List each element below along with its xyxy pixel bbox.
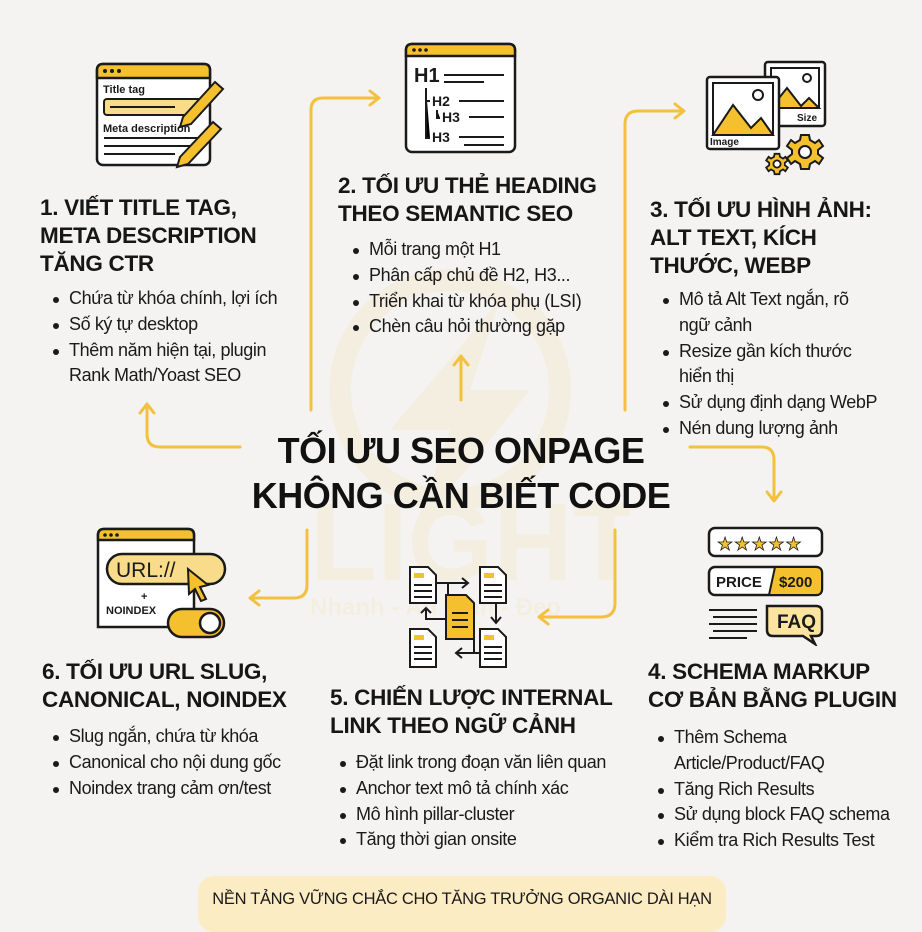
icon: schema: ★★★★★ bbox=[717, 534, 803, 555]
bullets 4: Thêm Schema bbox=[674, 727, 787, 747]
heading 5: LINK THEO NGỮ CẢNH bbox=[330, 713, 576, 738]
icon: internal links bbox=[409, 566, 507, 668]
heading 3: THƯỚC, WEBP bbox=[650, 253, 811, 278]
footer banner: NỀN TẢNG VỮNG CHẮC CHO TĂNG TRƯỞNG ORGANIC DÀI HẠN bbox=[212, 890, 712, 908]
icon: heading structure: H3 bbox=[432, 129, 450, 145]
icon: heading structure: H3 bbox=[442, 109, 460, 125]
heading 1: 1. VIẾT TITLE TAG, bbox=[40, 195, 237, 220]
heading 2 bbox=[338, 173, 597, 226]
icon: URL noindex bbox=[96, 528, 226, 638]
arrow: up to step 2 text bbox=[454, 356, 468, 400]
bullets 2 bbox=[353, 238, 581, 336]
bullets 1 bbox=[53, 288, 277, 385]
bullets 2: Triển khai từ khóa phụ (LSI) bbox=[369, 291, 581, 311]
heading 2: THEO SEMANTIC SEO bbox=[338, 201, 573, 226]
icon: images: Size bbox=[797, 113, 817, 124]
icon: schema: $200 bbox=[779, 574, 812, 591]
center title: TỐI ƯU SEO ONPAGE bbox=[278, 430, 644, 471]
icon: heading structure: H1 bbox=[414, 65, 440, 87]
bullets 5: Mô hình pillar-cluster bbox=[356, 804, 514, 824]
bullets 3 bbox=[663, 288, 877, 438]
heading 3: ALT TEXT, KÍCH bbox=[650, 225, 817, 250]
heading 4: 4. SCHEMA MARKUP bbox=[648, 659, 870, 684]
watermark logo bbox=[310, 269, 630, 620]
center title bbox=[252, 430, 670, 516]
heading 6: CANONICAL, NOINDEX bbox=[42, 687, 287, 712]
bullets 4: Sử dụng block FAQ schema bbox=[674, 804, 890, 824]
icon: schema bbox=[708, 526, 824, 646]
bullets 3: Mô tả Alt Text ngắn, rõ bbox=[679, 289, 849, 309]
bullets 3: hiển thị bbox=[679, 366, 734, 386]
bullets 3: Sử dụng định dạng WebP bbox=[679, 392, 877, 412]
bullets 6: Slug ngắn, chứa từ khóa bbox=[69, 726, 258, 746]
icon: title tag browser: Meta description bbox=[103, 123, 191, 135]
bullets 4: Article/Product/FAQ bbox=[674, 753, 824, 773]
bullets 6: Noindex trang cảm ơn/test bbox=[69, 778, 271, 798]
icon: images bbox=[706, 60, 826, 176]
icon: schema: PRICE bbox=[716, 574, 762, 591]
icon: images: Image bbox=[710, 137, 739, 148]
icon: heading structure: H2 bbox=[432, 93, 450, 109]
heading 4 bbox=[648, 659, 897, 712]
bullets 5: Tăng thời gian onsite bbox=[356, 829, 517, 849]
heading 6 bbox=[42, 659, 287, 712]
bullets 1: Số ký tự desktop bbox=[69, 314, 198, 334]
bullets 5 bbox=[340, 752, 606, 849]
arrow: center to step 1 bbox=[140, 404, 240, 447]
heading 2: 2. TỐI ƯU THẺ HEADING bbox=[338, 173, 597, 198]
bullets 4 bbox=[658, 727, 890, 850]
arrow: to step 4 bbox=[690, 447, 781, 501]
bullets 1: Thêm năm hiện tại, plugin bbox=[69, 340, 266, 360]
bullets 2: Phân cấp chủ đề H2, H3... bbox=[369, 265, 570, 285]
bullets 1: Rank Math/Yoast SEO bbox=[69, 365, 241, 385]
icon: title tag browser bbox=[96, 62, 224, 168]
bullets 6: Canonical cho nội dung gốc bbox=[69, 752, 281, 772]
center title: KHÔNG CẦN BIẾT CODE bbox=[252, 475, 670, 516]
heading 5 bbox=[330, 685, 613, 738]
heading 3: 3. TỐI ƯU HÌNH ẢNH: bbox=[650, 197, 872, 222]
bullets 4: Kiểm tra Rich Results Test bbox=[674, 830, 874, 850]
arrow: to step 5 bbox=[539, 530, 615, 624]
arrow: to step 6 bbox=[250, 530, 307, 605]
bullets 4: Tăng Rich Results bbox=[674, 779, 814, 799]
bullets 3: ngữ cảnh bbox=[679, 315, 752, 335]
bullets 5: Đặt link trong đoạn văn liên quan bbox=[356, 752, 606, 772]
icon: URL noindex: NOINDEX bbox=[106, 605, 157, 617]
heading 3 bbox=[650, 197, 872, 278]
arrow: center to step 2 bbox=[311, 91, 379, 410]
heading 4: CƠ BẢN BẰNG PLUGIN bbox=[648, 687, 897, 712]
bullets 3: Resize gần kích thước bbox=[679, 341, 852, 361]
icon: URL noindex: URL:// bbox=[116, 559, 176, 582]
bullets 2: Chèn câu hỏi thường gặp bbox=[369, 316, 565, 336]
heading 1 bbox=[40, 195, 256, 276]
footer banner bbox=[198, 876, 726, 932]
bullets 6 bbox=[53, 726, 281, 798]
icon: title tag browser: Title tag bbox=[103, 84, 145, 96]
heading 6: 6. TỐI ƯU URL SLUG, bbox=[42, 659, 267, 684]
bullets 3: Nén dung lượng ảnh bbox=[679, 418, 838, 438]
arrow: to step 3 bbox=[625, 104, 684, 410]
bullets 5: Anchor text mô tả chính xác bbox=[356, 778, 568, 798]
bullets 2: Mỗi trang một H1 bbox=[369, 239, 501, 259]
icon: schema: FAQ bbox=[777, 612, 816, 633]
heading 1: TĂNG CTR bbox=[40, 251, 154, 276]
heading 1: META DESCRIPTION bbox=[40, 223, 256, 248]
heading 5: 5. CHIẾN LƯỢC INTERNAL bbox=[330, 685, 613, 710]
bullets 1: Chứa từ khóa chính, lợi ích bbox=[69, 288, 277, 308]
icon: URL noindex: + bbox=[141, 591, 147, 603]
icon: heading structure bbox=[404, 42, 516, 154]
